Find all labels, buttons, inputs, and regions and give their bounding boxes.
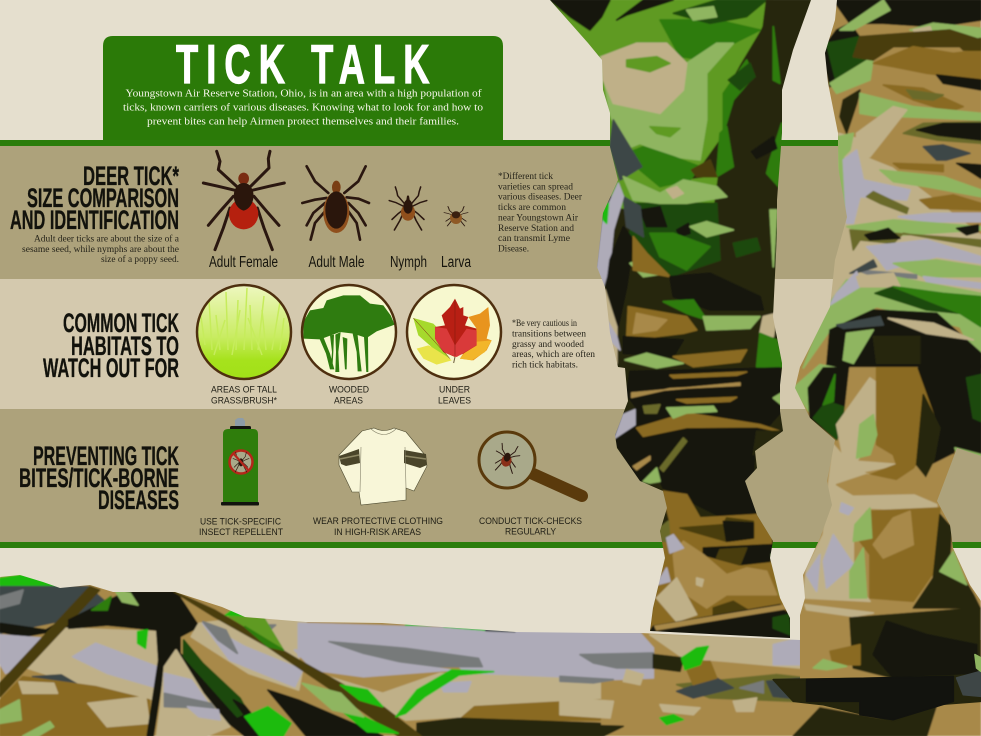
tick size labels: Adult Male	[308, 254, 364, 271]
icon: magnifying glass with tick	[479, 432, 582, 496]
heading: deer tick: AND IDENTIFICATION	[10, 205, 179, 235]
tick size labels: Larva	[441, 254, 471, 271]
habitat note: grassy and wooded	[512, 339, 584, 350]
tick variety note: ticks are common	[498, 202, 566, 213]
prevention captions: IN HIGH-RISK AREAS	[334, 526, 421, 537]
panel: preventing tick bites	[0, 409, 981, 548]
intro text: Youngstown Air Reserve Station, Ohio, is in an area with a high population of	[126, 88, 482, 100]
heading: deer tick: DEER TICK*	[83, 161, 179, 191]
tick variety note: near Youngstown Air	[498, 212, 579, 224]
prevention captions: INSECT REPELLENT	[199, 526, 283, 537]
tick size labels: Adult Female	[209, 254, 278, 271]
habitat captions: AREAS	[334, 394, 363, 406]
icon: under leaves circle	[407, 285, 501, 379]
icon: adult female tick	[203, 151, 284, 250]
prevention captions: REGULARLY	[505, 526, 557, 536]
icon: tall grass circle	[197, 285, 291, 379]
icon: repellent can	[221, 418, 259, 506]
heading: deer tick	[10, 161, 179, 235]
prevention captions	[199, 515, 582, 537]
prevention captions: USE TICK-SPECIFIC	[200, 516, 281, 526]
icon: wooded areas circle	[302, 285, 396, 379]
size description text	[22, 234, 180, 265]
prevention captions: WEAR PROTECTIVE CLOTHING	[313, 515, 443, 526]
boot shadow on ground	[773, 655, 981, 721]
habitat note: rich tick habitats.	[512, 359, 578, 370]
tick variety note: can transmit Lyme	[498, 233, 570, 244]
panel: common tick habitats	[0, 279, 833, 409]
intro text: ticks, known carriers of various diseases. Knowing what to look for and how to	[123, 102, 483, 114]
habitat captions: LEAVES	[438, 394, 471, 406]
heading: prevention	[19, 441, 179, 515]
icon: larva tick	[444, 206, 468, 226]
icon: adult male tick	[302, 166, 369, 240]
icon: nymph tick	[389, 187, 427, 230]
heading: habitats	[43, 308, 179, 383]
tick size labels	[209, 254, 471, 271]
intro text	[123, 88, 483, 128]
heading: prevention: PREVENTING TICK	[33, 441, 179, 471]
tick variety note: Reserve Station and	[498, 223, 574, 234]
panel: title banner	[103, 33, 503, 140]
habitat note: *Be very cautious in	[512, 318, 577, 329]
tick variety note: Disease.	[498, 244, 529, 254]
habitat note: areas, which are often	[512, 349, 595, 360]
tick variety note: various diseases. Deer	[498, 192, 583, 203]
tick variety note: varieties can spread	[498, 181, 573, 192]
panel: deer tick size comparison	[0, 140, 981, 279]
tick variety note: *Different tick	[498, 171, 553, 182]
habitat captions: WOODED	[329, 384, 369, 394]
habitat captions: GRASS/BRUSH*	[211, 394, 277, 406]
habitat captions: AREAS OF TALL	[211, 384, 277, 394]
size description text: Adult deer ticks are about the size of a	[34, 234, 180, 244]
habitat captions: UNDER	[439, 384, 470, 394]
title: TICK TALK	[176, 33, 430, 95]
soldier left leg in camouflage	[540, 0, 812, 640]
intro text: prevent bites can help Airmen protect themselves and their families.	[147, 116, 459, 128]
size description text: size of a poppy seed.	[101, 254, 179, 265]
heading: prevention: DISEASES	[98, 485, 179, 515]
habitat captions	[211, 384, 471, 406]
heading: habitats: WATCH OUT FOR	[43, 353, 179, 383]
soldier right leg in camouflage	[790, 0, 981, 690]
heading: habitats: COMMON TICK	[63, 308, 179, 338]
heading: deer tick: SIZE COMPARISON	[27, 183, 179, 213]
habitat note: transitions between	[512, 328, 586, 339]
heading: habitats: HABITATS TO	[71, 331, 179, 361]
tick variety note	[498, 171, 583, 254]
icon: protective shirt	[339, 428, 427, 505]
prevention captions: CONDUCT TICK-CHECKS	[479, 515, 582, 526]
ground: camouflage rock and roots	[0, 570, 981, 736]
tick size labels: Nymph	[390, 254, 427, 271]
size description text: sesame seed, while nymphs are about the	[22, 244, 179, 255]
heading: prevention: BITES/TICK-BORNE	[19, 463, 179, 493]
habitat note	[512, 318, 595, 370]
